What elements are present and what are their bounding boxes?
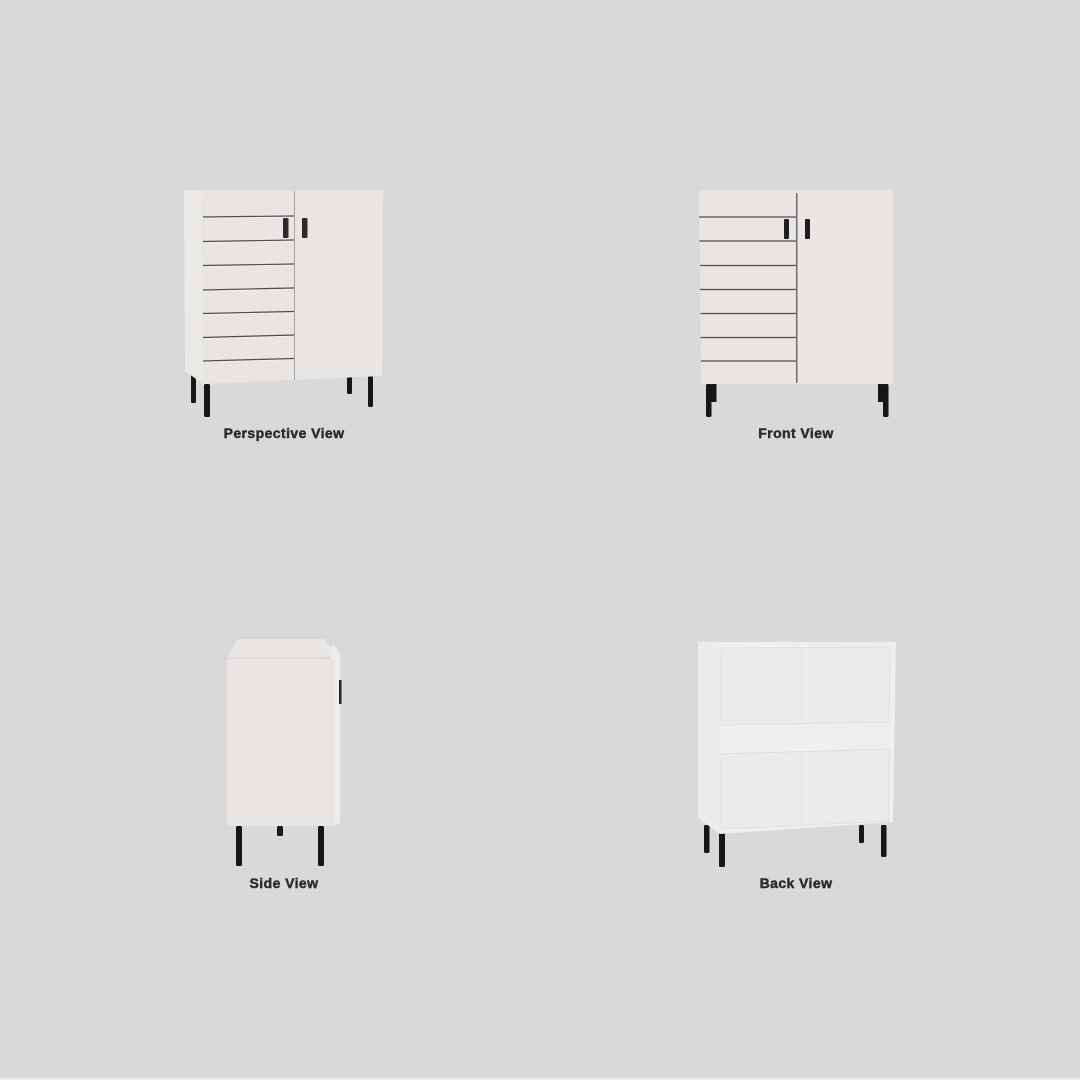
icon: perspective cabinet body xyxy=(184,190,383,384)
icon: perspective legs xyxy=(191,375,373,417)
icon: side legs xyxy=(236,826,324,866)
panel: perspective view xyxy=(184,190,383,441)
icon: side cabinet body xyxy=(227,639,342,826)
icon: front cabinet body xyxy=(699,190,893,384)
panel: back view xyxy=(698,642,896,891)
label: back view: Back View xyxy=(760,875,832,891)
label: perspective view: Perspective View xyxy=(224,425,344,441)
panel: front view xyxy=(699,190,893,441)
icon: back cabinet body xyxy=(698,642,896,834)
icon: back legs xyxy=(704,825,886,867)
panel: side view xyxy=(227,639,342,891)
icon: front legs xyxy=(706,384,888,417)
label: front view: Front View xyxy=(758,425,834,441)
label: side view: Side View xyxy=(250,875,318,891)
